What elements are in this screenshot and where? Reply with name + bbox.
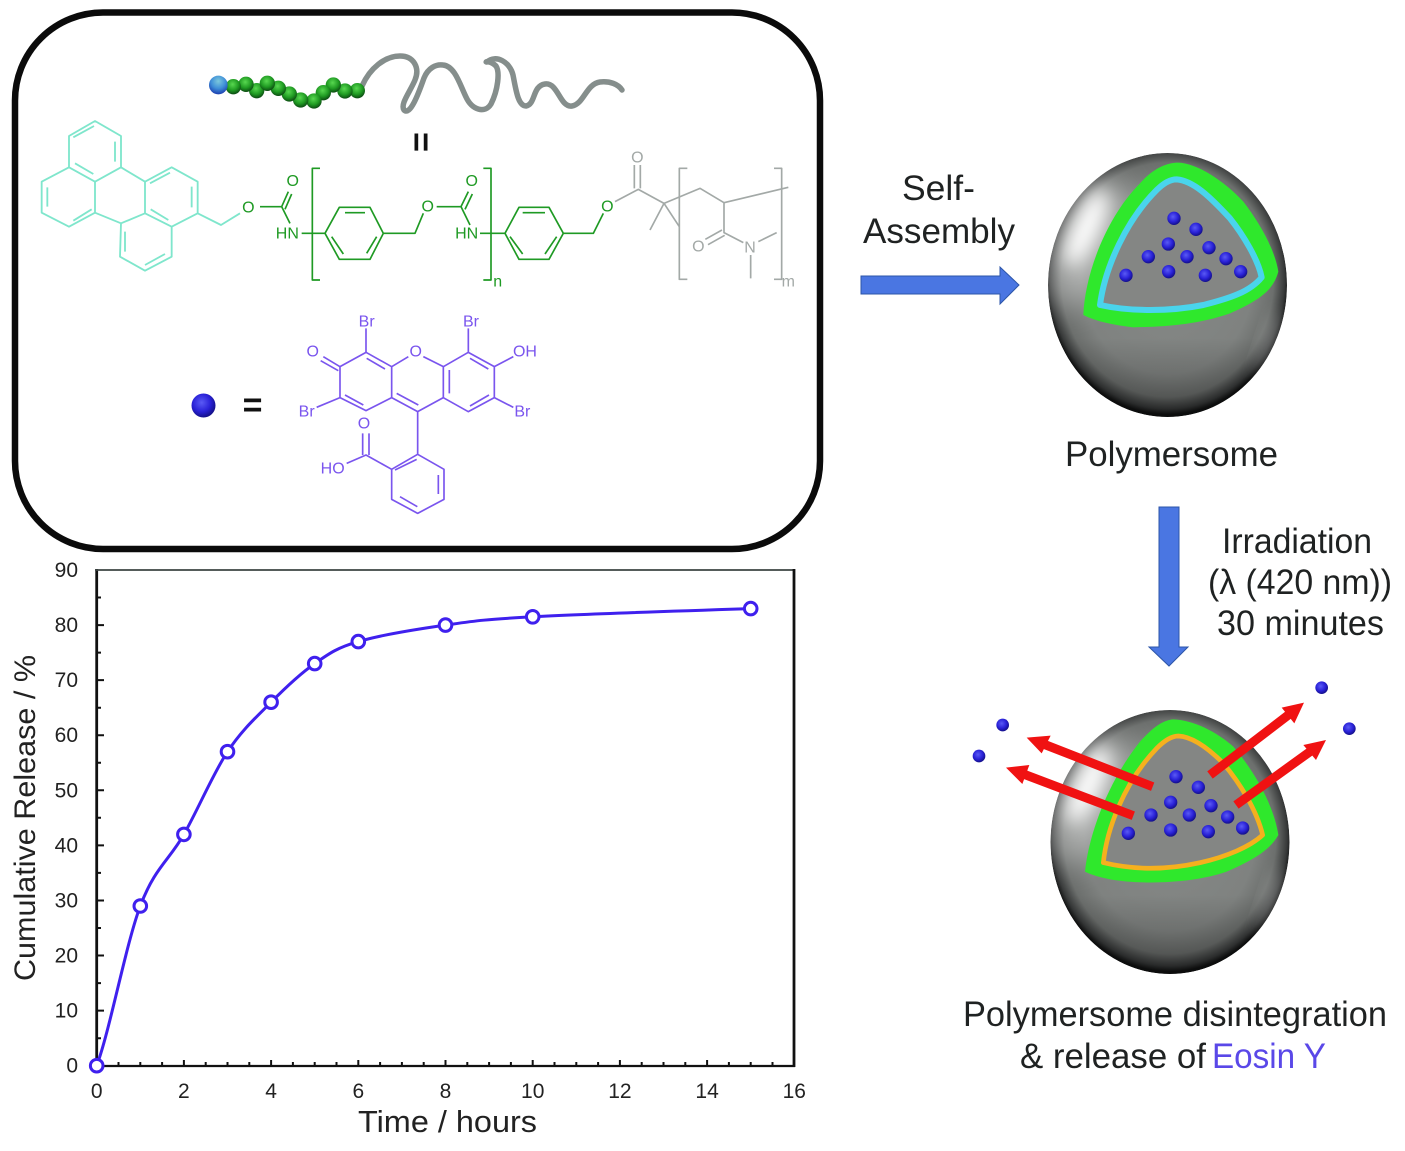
x axis tick labels: 4: [265, 1080, 277, 1103]
x axis tick labels: [91, 1080, 806, 1103]
label: Self-Assembly: Self-: [902, 169, 975, 208]
chemical structure: second green repeat unit: O: [601, 199, 614, 216]
green bead chain with blue end group: [209, 76, 365, 109]
red arrow lower left: [1006, 765, 1133, 816]
release curve: [97, 609, 751, 1066]
chemical structure: Eosin Y: [299, 313, 537, 513]
sphere: [1027, 153, 1287, 417]
x axis tick labels: 2: [178, 1080, 190, 1103]
grey hydrophilic coil: [362, 56, 622, 111]
equals sign (rotated): =: [402, 132, 440, 152]
chemical structure: green repeat unit: [242, 168, 423, 280]
y axis tick labels: 50: [55, 779, 78, 802]
label: disintegration and release: [963, 995, 1387, 1076]
chemical structure: Eosin Y: OH: [513, 344, 537, 361]
label: disintegration and release: Eosin Y: [1212, 1037, 1326, 1076]
y axis title: Cumulative Release / %: [9, 655, 42, 981]
red arrow upper right: [1210, 703, 1304, 775]
chemical structure: Eosin Y: Br: [299, 404, 315, 421]
orange degraded layer and core: [1103, 736, 1263, 868]
label: disintegration and release: Polymersome disintegration: [963, 995, 1387, 1034]
released Eosin Y: [973, 681, 1356, 762]
label: Self-Assembly: Assembly: [863, 212, 1015, 251]
sphere: [1029, 710, 1290, 974]
x axis tick labels: 6: [352, 1080, 364, 1103]
Eosin Y inside: [1122, 770, 1249, 840]
chemical structure: Eosin Y: O: [409, 344, 422, 361]
arrow: irradiation: [1149, 507, 1188, 666]
panel: molecular structures: [15, 12, 820, 549]
axis tick marks: [97, 598, 772, 1066]
y axis tick labels: 90: [55, 559, 78, 582]
y axis tick labels: 10: [55, 1000, 78, 1023]
chemical structure: grey repeat unit: O: [692, 239, 705, 256]
equals sign: =: [243, 386, 262, 424]
illustration: disintegrating polymersome: [973, 681, 1356, 974]
chemical structure: grey repeat unit: O: [631, 149, 644, 166]
encapsulated Eosin Y: [1119, 212, 1247, 282]
chemical structure: Eosin Y: Br: [514, 404, 531, 421]
y axis tick labels: [55, 559, 78, 1078]
label: irradiation conditions: (λ (420 nm)): [1208, 563, 1392, 602]
x axis tick labels: 0: [91, 1080, 103, 1103]
data point markers: [90, 602, 757, 1072]
y axis tick labels: 80: [55, 614, 78, 637]
chemical structure: Eosin Y: Br: [359, 313, 375, 330]
chemical structure: Eosin Y: O: [306, 344, 319, 361]
chemical structure: second green repeat unit: n: [493, 273, 502, 290]
plot frame: [95, 569, 795, 1067]
y axis tick labels: 0: [66, 1055, 78, 1078]
label: irradiation conditions: [1208, 522, 1392, 643]
chemical structure: second green repeat unit: O: [421, 199, 434, 216]
label: disintegration and release: & release of: [1020, 1037, 1206, 1076]
cyan perylene layer and core: [1100, 179, 1262, 310]
chemical structure: green repeat unit: O: [242, 199, 255, 216]
label: irradiation conditions: Irradiation: [1222, 522, 1372, 561]
x axis tick labels: 10: [521, 1080, 544, 1103]
label: Polymersome: Polymersome: [1065, 435, 1278, 474]
polymer chain cartoon: [209, 56, 622, 111]
y axis tick labels: 60: [55, 724, 78, 747]
y axis tick labels: 40: [55, 834, 78, 857]
red arrow upper left: [1027, 736, 1153, 787]
legend: Eosin Y dot equals: [192, 386, 262, 424]
y axis tick labels: 30: [55, 890, 78, 912]
chemical structure: second green repeat unit: HN: [455, 226, 478, 243]
wedge layers: [1083, 163, 1278, 327]
red arrow lower right: [1236, 740, 1326, 805]
chemical structure: grey repeat unit: [615, 149, 795, 290]
y axis tick labels: 20: [55, 944, 78, 968]
chart: cumulative release over time: [9, 559, 806, 1139]
chemical structure: grey repeat unit: m: [782, 273, 795, 290]
green hydrophobic layer: [1083, 163, 1278, 327]
label: irradiation conditions: 30 minutes: [1217, 604, 1384, 643]
chemical structure: Eosin Y: HO: [321, 460, 345, 477]
label: Self-Assembly: [863, 169, 1015, 251]
x axis tick labels: 12: [608, 1080, 632, 1103]
chemical structure: second green repeat unit: [421, 168, 614, 290]
x axis tick labels: 8: [440, 1080, 451, 1103]
y axis tick labels: 70: [55, 669, 78, 692]
x axis tick labels: 16: [783, 1080, 806, 1103]
chemical structure: perylene block: [42, 121, 240, 271]
illustration: intact polymersome: [1027, 153, 1287, 417]
chemical structure: green repeat unit: O: [286, 173, 299, 190]
panel border: [15, 12, 820, 549]
green layer: [1085, 719, 1278, 882]
chemical structure: green repeat unit: HN: [276, 226, 299, 243]
icon: Eosin Y sphere: [192, 394, 216, 418]
arrow: self-assembly: [861, 267, 1019, 304]
chemical structure: second green repeat unit: O: [465, 173, 478, 190]
x axis title: Time / hours: [358, 1104, 537, 1139]
chemical structure: grey repeat unit: N: [744, 239, 756, 256]
chemical structure: Eosin Y: O: [358, 415, 370, 432]
x axis tick labels: 14: [695, 1080, 719, 1103]
chemical structure: Eosin Y: Br: [463, 313, 480, 330]
